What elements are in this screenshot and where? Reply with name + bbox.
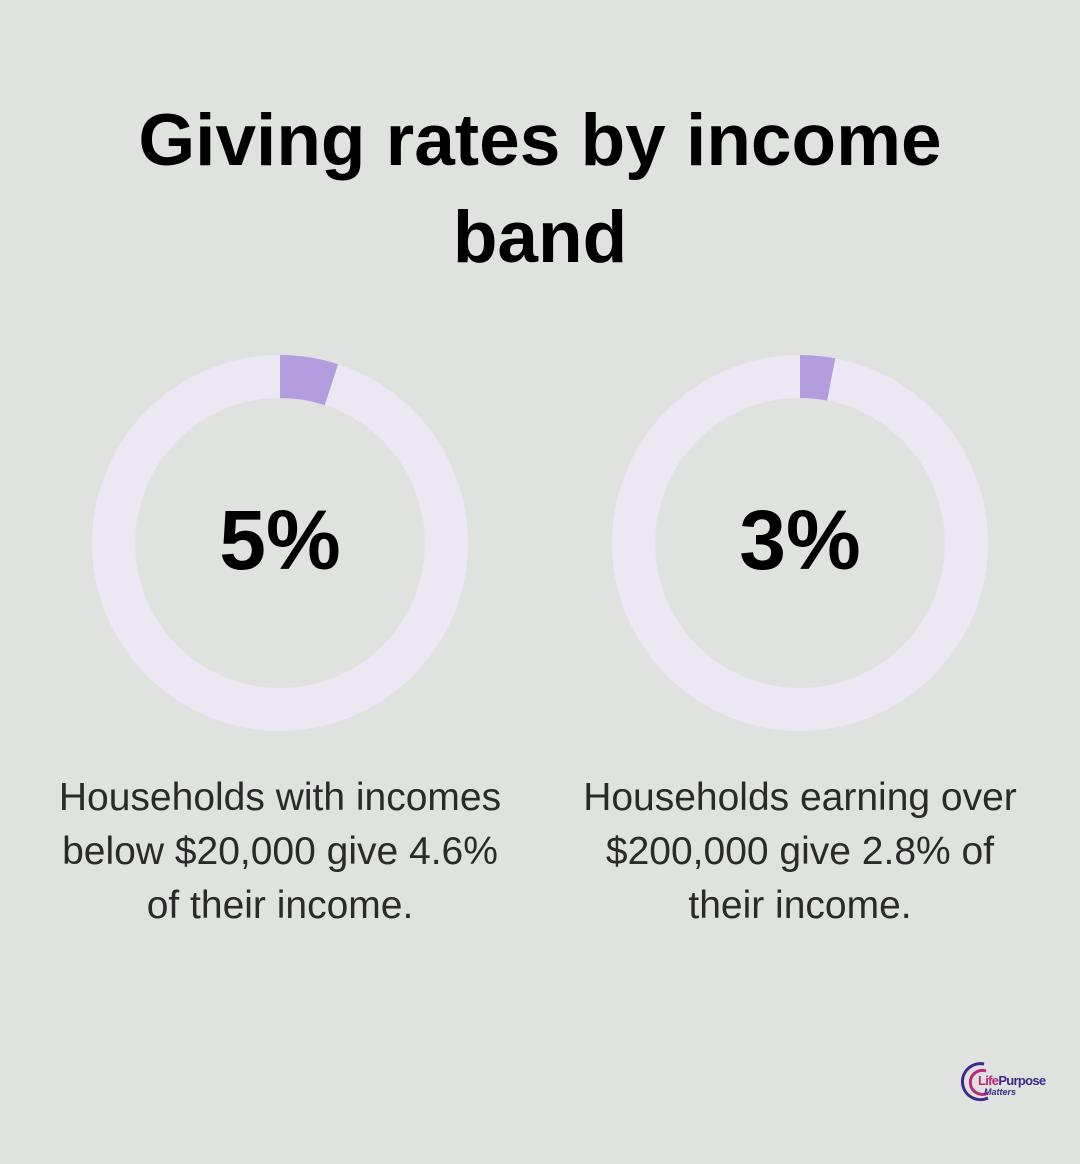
donut chart: 5% — [92, 355, 468, 731]
title: Giving rates by income — [138, 100, 942, 181]
text: low income — [59, 776, 501, 927]
logo: LifePurpose — [978, 1073, 1045, 1088]
logo: Matters — [984, 1087, 1016, 1097]
text: high income: their income. — [688, 884, 912, 927]
value: 3%: 3% — [739, 493, 861, 587]
title — [138, 100, 942, 278]
value: 5%: 5% — [219, 493, 341, 587]
text: high income: $200,000 give 2.8% of — [606, 830, 994, 873]
text: high income: Households earning over — [583, 776, 1017, 819]
title: band — [453, 197, 627, 278]
logo — [961, 1062, 1046, 1102]
text: low income: below $20,000 give 4.6% — [62, 830, 498, 873]
text: high income — [583, 776, 1017, 927]
text: low income: Households with incomes — [59, 776, 501, 819]
donut chart: 3% — [612, 355, 988, 731]
text: low income: of their income. — [147, 884, 413, 927]
